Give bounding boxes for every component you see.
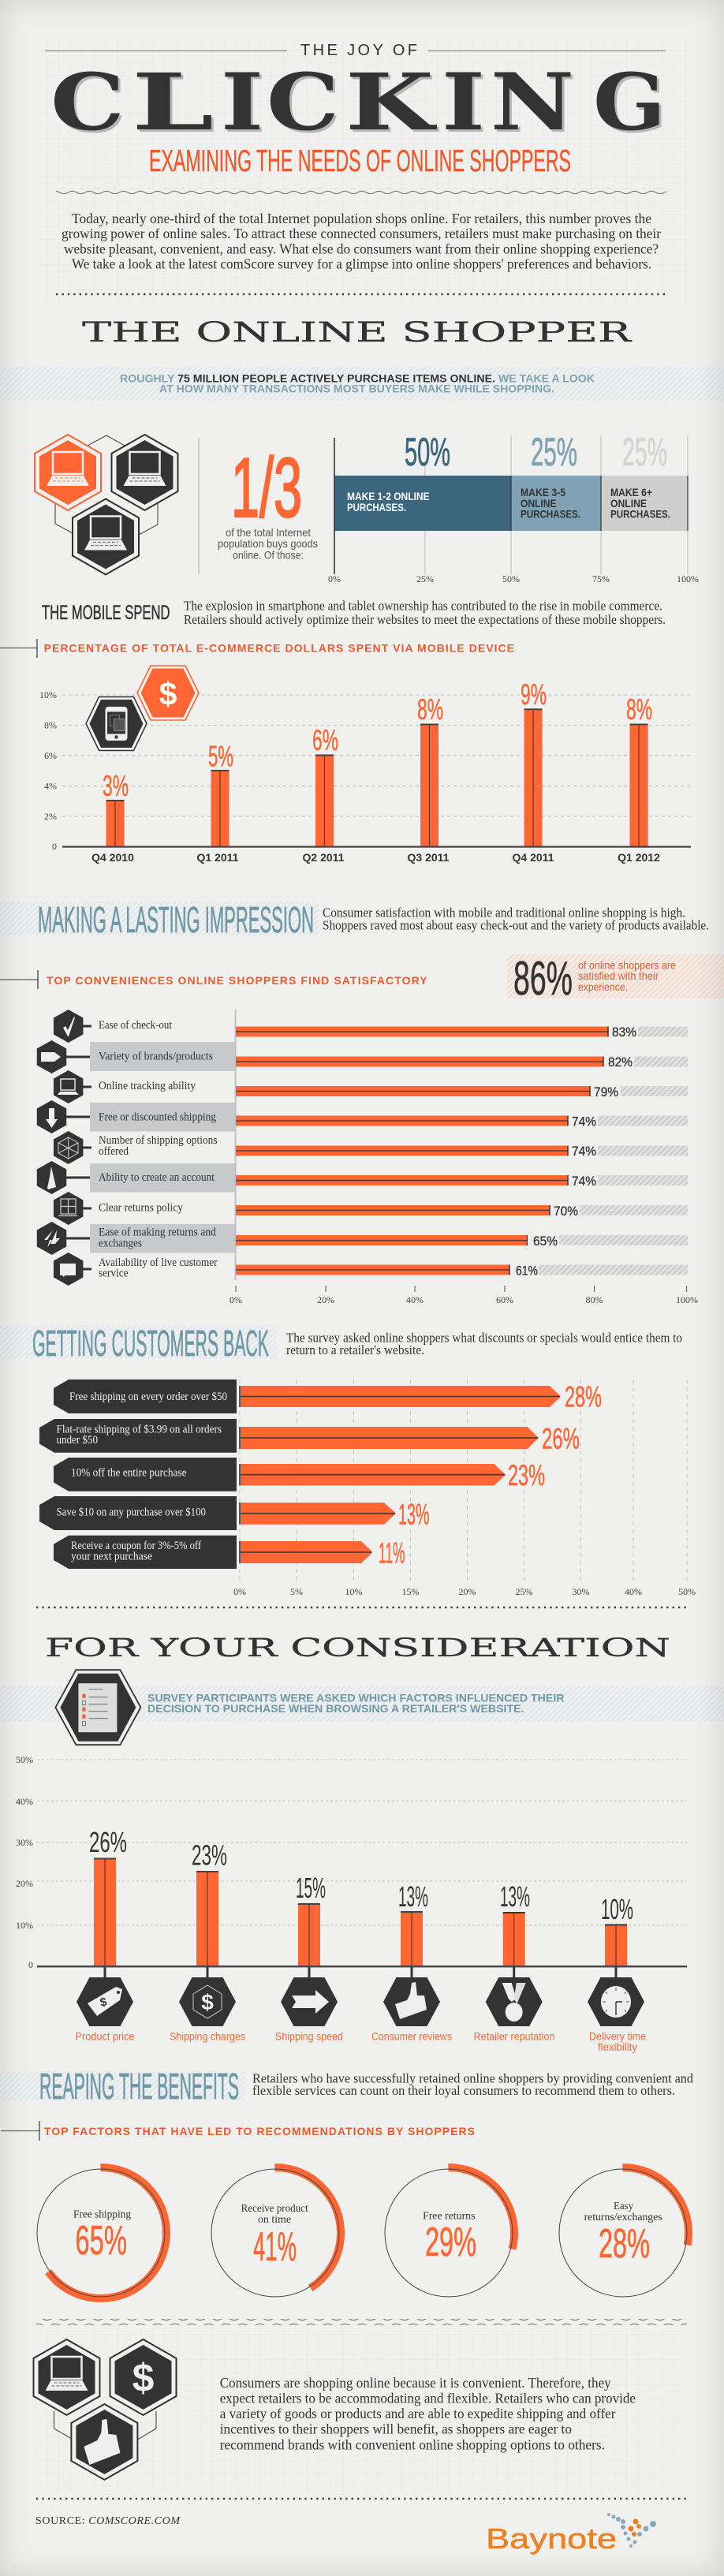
row: free shipping: 74% — [572, 1114, 596, 1129]
icon: laptop hexagon — [33, 2339, 99, 2415]
icon: dollar — [179, 1977, 236, 2026]
stat: one third — [218, 440, 318, 562]
chart: mobile share of e-commerce: Q3 2011 — [408, 851, 450, 864]
row: ease of check-out — [54, 1010, 688, 1043]
intro text: website pleasant, convenient, and easy. What else do consumers want from their online shopping experience? — [64, 241, 659, 257]
heading: for your consideration: FOR YOUR CONSIDERATION — [45, 1633, 670, 1663]
bar: product price — [89, 1826, 127, 1966]
row: shipping options — [54, 1131, 688, 1164]
chart: purchase frequency stacked bar: 25% — [622, 430, 667, 474]
lasting impression text: Consumer satisfaction with mobile and traditional online shopping is high. — [323, 905, 685, 920]
title: G — [593, 57, 666, 148]
title: K — [345, 57, 438, 148]
chart: getting customers back: 40% — [625, 1586, 642, 1597]
survey intro text — [147, 1691, 565, 1715]
bar: Q3 2011: 8% — [417, 693, 443, 726]
donut: free returns: 29% — [425, 2219, 476, 2265]
bar: consumer reviews: 13% — [398, 1880, 428, 1913]
chart: mobile share of e-commerce: Q4 2011 — [513, 851, 554, 864]
row: save ten dollars: 13% — [398, 1499, 429, 1531]
bar: delivery time: 10% — [601, 1893, 633, 1925]
donut: receive on time — [210, 2167, 341, 2298]
band: reaping the benefits — [0, 2071, 244, 2100]
row: ease of check-out: 83% — [612, 1025, 636, 1040]
closing text: a variety of goods or products and are able to expedite shipping and offer — [220, 2406, 615, 2421]
row: create an account: 74% — [572, 1174, 596, 1189]
icon: thumbs up hexagon — [71, 2404, 137, 2480]
row: live customer service: 61% — [516, 1264, 538, 1278]
row: variety of brands — [37, 1040, 688, 1073]
bar: retailer reputation: 13% — [500, 1880, 530, 1913]
survey intro text: DECISION TO PURCHASE WHEN BROWSING A RETAILER'S WEBSITE. — [147, 1702, 524, 1715]
stat: one third: population buys goods — [218, 537, 318, 550]
row: free shipping — [37, 1100, 688, 1133]
chart: mobile share of e-commerce: 0 — [52, 841, 57, 852]
icon: dark laptop hexagon — [112, 435, 178, 510]
donut: easy returns — [558, 2167, 689, 2298]
icon: thumbs up — [383, 1977, 440, 2026]
closing text: recommend brands with convenient online shopping options to others. — [220, 2436, 605, 2452]
chart: mobile share of e-commerce: 2% — [44, 811, 57, 822]
chart: top conveniences: 100% — [676, 1294, 698, 1305]
row: returns and exchanges: exchanges — [99, 1237, 142, 1249]
chart: getting customers back: 11% — [379, 1537, 405, 1570]
chart: purchase frequency stacked bar: 0% — [328, 573, 341, 584]
closing text: expect retailers to be accommodating and flexible. Retailers who can provide — [220, 2390, 636, 2406]
closing text — [220, 2375, 636, 2452]
chart: getting customers back: 15% — [402, 1586, 420, 1597]
callout: 86 percent satisfied: 86% — [513, 952, 573, 1005]
row: variety of brands: Variety of brands/products — [99, 1051, 213, 1063]
mobile spend text: Retailers should actively optimize their websites to meet the expectations of these mobile shoppers. — [184, 612, 666, 627]
chart: getting customers back: 20% — [459, 1586, 476, 1597]
row: clear returns policy: 70% — [554, 1204, 578, 1219]
bar: Q4 2011 — [521, 678, 547, 846]
title: I — [221, 57, 263, 148]
chart: purchase factors: Shipping speed — [275, 2030, 343, 2043]
bar: Q3 2011 — [417, 693, 443, 846]
chart: mobile share of e-commerce: Q1 2011 — [197, 851, 239, 864]
chart: purchase frequency stacked bar: 100% — [677, 573, 699, 584]
row: clear returns policy — [54, 1192, 688, 1225]
icon: dollar hexagon — [137, 666, 199, 720]
lasting impression text — [323, 905, 709, 932]
chart: purchase frequency stacked bar: PURCHASES. — [347, 502, 406, 513]
bar: shipping speed — [296, 1872, 326, 1966]
bar: Q4 2011: 9% — [521, 678, 547, 711]
chart: purchase factors: 10% — [16, 1920, 33, 1931]
chart: purchase factors: 30% — [16, 1837, 33, 1848]
icon cluster: three laptops — [35, 435, 178, 574]
row: coupon: your next purchase — [71, 1551, 152, 1563]
chart: mobile share of e-commerce — [39, 678, 691, 864]
chart: getting customers back: 50% — [678, 1586, 696, 1597]
row: coupon: Receive a coupon for 3%-5% off — [71, 1540, 201, 1552]
chart: mobile share of e-commerce: Q1 2012 — [618, 851, 660, 864]
chart: mobile share of e-commerce: 4% — [44, 781, 57, 792]
bar: shipping speed: 15% — [296, 1872, 326, 1904]
subheading: top conveniences: TOP CONVENIENCES ONLINE SHOPPERS FIND SATISFACTORY — [47, 974, 427, 987]
donut: free shipping — [35, 2167, 166, 2298]
donut: free shipping: 65% — [75, 2218, 127, 2264]
intro text — [62, 211, 661, 271]
heading: the mobile spend: THE MOBILE SPEND — [42, 602, 170, 624]
chart: purchase factors: Product price — [76, 2030, 135, 2043]
row: free shipping over 50: Free shipping on every order over $50 — [69, 1391, 227, 1403]
title: N — [491, 57, 574, 148]
band: survey participants — [0, 1686, 724, 1722]
donut: free shipping: Free shipping — [73, 2209, 131, 2221]
bar: Q1 2012: 8% — [626, 693, 652, 726]
closing text: incentives to their shoppers will benefit, as shoppers are eager to — [220, 2421, 572, 2437]
row: online tracking — [54, 1070, 688, 1103]
chart: purchase frequency stacked bar: 25% — [531, 430, 577, 474]
icon: dollar hexagon: $ — [132, 2356, 155, 2400]
chart: top conveniences: 80% — [585, 1294, 603, 1305]
row: clear returns policy: Clear returns policy — [99, 1202, 183, 1215]
chart: purchase factors: Delivery time — [589, 2030, 646, 2043]
chart: purchase frequency stacked bar: PURCHASES. — [610, 508, 670, 521]
row: create an account — [37, 1161, 688, 1194]
bar: Q2 2011 — [312, 724, 338, 846]
chart: getting customers back: 5% — [290, 1586, 303, 1597]
row: free shipping over 50 — [54, 1379, 602, 1413]
callout: 86 percent satisfied — [507, 952, 724, 1005]
row: live customer service — [54, 1253, 688, 1286]
row: live customer service: service — [99, 1267, 129, 1280]
title: L — [132, 57, 214, 148]
row: ten percent off — [54, 1458, 545, 1491]
title: I — [442, 57, 485, 148]
text: GETTING CUSTOMERS BACK — [32, 1323, 269, 1364]
stat: one third: 1/3 — [231, 440, 302, 535]
bar: retailer reputation — [500, 1880, 530, 1966]
callout: 86 percent satisfied: experience. — [578, 980, 628, 993]
icon: arrow — [281, 1977, 338, 2026]
logo: Baynote: Baynote — [486, 2522, 617, 2555]
bar: consumer reviews — [398, 1880, 428, 1966]
donut: easy returns: 28% — [599, 2221, 650, 2267]
chart: purchase frequency stacked bar: ONLINE — [610, 498, 647, 510]
bar: Q4 2010 — [103, 770, 129, 846]
icon cluster: laptop, dollar, thumbs up — [33, 2339, 177, 2480]
chart: purchase factors: 0 — [28, 1959, 33, 1970]
chart: purchase frequency stacked bar: ONLINE — [521, 498, 557, 510]
heading: the online shopper: THE ONLINE SHOPPER — [82, 317, 633, 349]
row: variety of brands: 82% — [608, 1055, 633, 1070]
stat: one third: of the total Internet — [226, 526, 311, 539]
icon: survey checklist hexagon — [55, 1670, 140, 1745]
chart: purchase frequency stacked bar: 50% — [502, 573, 520, 584]
chart: mobile share of e-commerce: 6% — [44, 750, 57, 761]
chart: purchase factors: Retailer reputation — [473, 2030, 555, 2043]
row: create an account: Ability to create an account — [99, 1171, 215, 1184]
source: SOURCE: COMSCORE.COM — [35, 2515, 181, 2527]
chart: purchase factors: Consumer reviews — [371, 2030, 452, 2043]
mobile spend text — [184, 599, 666, 627]
callout: 86 percent satisfied: of online shoppers are — [578, 959, 676, 972]
row: flat-rate shipping: Flat-rate shipping of $3.99 on all orders — [57, 1424, 222, 1436]
chart: purchase frequency stacked bar: MAKE 6+ — [610, 487, 652, 498]
chart: purchase frequency stacked bar: MAKE 1-2 ONLINE — [347, 491, 429, 502]
title kicker: THE JOY OF — [300, 42, 417, 59]
chart: top conveniences: 60% — [496, 1294, 513, 1305]
chart: purchase factors: 40% — [16, 1796, 33, 1807]
row: returns and exchanges — [37, 1222, 688, 1255]
row: save ten dollars — [39, 1496, 429, 1531]
chart: purchase factors: 20% — [16, 1878, 33, 1889]
row: shipping options: offered — [99, 1145, 129, 1158]
reaping text: Retailers who have successfully retained online shoppers by providing convenient and — [252, 2071, 693, 2086]
chart: getting customers back: 10% — [345, 1586, 363, 1597]
chart: getting customers back: 25% — [516, 1586, 533, 1597]
icon: dollar hexagon — [110, 2339, 177, 2415]
chart: purchase frequency stacked bar: PURCHASES. — [521, 508, 580, 521]
title: C — [267, 57, 339, 148]
chart: top conveniences — [37, 1010, 698, 1305]
row: live customer service: Availability of live customer — [99, 1256, 218, 1269]
chart: top conveniences: 20% — [317, 1294, 334, 1305]
stat: one third: online. Of those: — [233, 549, 304, 562]
chart: purchase frequency stacked bar: 75% — [592, 573, 610, 584]
icon: medal — [486, 1977, 543, 2026]
chart: mobile share of e-commerce: 10% — [39, 689, 57, 700]
row: save ten dollars: Save $10 on any purchase over $100 — [57, 1506, 206, 1519]
icon: dollar: $ — [201, 1990, 214, 2014]
chart: purchase frequency stacked bar — [328, 430, 699, 584]
logo: Baynote — [486, 2513, 656, 2555]
customers back text — [286, 1331, 682, 1357]
row: coupon — [54, 1536, 405, 1570]
title: C — [50, 57, 125, 148]
header grid paper — [37, 38, 688, 301]
chart: mobile share of e-commerce: Q2 2011 — [303, 851, 345, 864]
row: ease of check-out: Ease of check-out — [99, 1019, 173, 1032]
icon: dollar hexagon: $ — [159, 675, 177, 711]
chart: purchase frequency stacked bar: 25% — [416, 573, 434, 584]
intro text: growing power of online sales. To attract these connected consumers, retailers must make purchasing on their — [62, 226, 661, 241]
row: ten percent off: 23% — [508, 1459, 545, 1491]
band: online shopper intro: ROUGHLY 75 MILLION PEOPLE ACTIVELY PURCHASE ITEMS ONLINE. WE TAKE A LOOK — [120, 372, 595, 385]
chart: purchase factors: 50% — [16, 1754, 33, 1765]
icon: orange laptop hexagon — [35, 435, 101, 510]
band: online shopper intro: AT HOW MANY TRANSACTIONS MOST BUYERS MAKE WHILE SHOPPING. — [159, 382, 554, 394]
row: free shipping over 50: 28% — [565, 1380, 602, 1413]
row: free shipping: Free or discounted shipping — [99, 1111, 216, 1124]
bar: shipping charges — [192, 1839, 227, 1966]
band: online shopper intro — [0, 367, 724, 401]
chart: purchase factors: Shipping charges — [170, 2030, 245, 2043]
chart: purchase frequency stacked bar: MAKE 3-5 — [521, 487, 565, 498]
row: online tracking: Online tracking ability — [99, 1080, 196, 1092]
row: returns and exchanges: 65% — [533, 1234, 558, 1249]
icon: price tag — [77, 1977, 133, 2026]
row: flat-rate shipping: 26% — [542, 1423, 580, 1455]
chart: purchase frequency stacked bar: 50% — [405, 430, 450, 474]
text: REAPING THE BENEFITS — [39, 2066, 239, 2107]
bar: Q1 2011 — [208, 740, 233, 846]
bar: Q4 2010: 3% — [103, 770, 129, 802]
customers back text: The survey asked online shoppers what discounts or specials would entice them to — [286, 1331, 682, 1346]
chart: top conveniences: 40% — [406, 1294, 424, 1305]
bar: product price: 26% — [89, 1826, 127, 1858]
row: shipping options: 74% — [572, 1144, 596, 1159]
icon: lower laptop hexagon — [73, 498, 139, 574]
bar: shipping charges: 23% — [192, 1839, 227, 1871]
icon: clock — [588, 1977, 644, 2026]
bar: delivery time — [601, 1893, 633, 1966]
chart: mobile share of e-commerce: 8% — [44, 719, 57, 730]
survey intro text: SURVEY PARTICIPANTS WERE ASKED WHICH FACTORS INFLUENCED THEIR — [147, 1691, 565, 1704]
chart: getting customers back — [39, 1379, 696, 1597]
bar: Q1 2012 — [626, 693, 652, 846]
bar: Q1 2011: 5% — [208, 740, 233, 773]
donut: easy returns: returns/exchanges — [584, 2212, 662, 2223]
reaping text: flexible services can count on their loyal consumers to recommend them to others. — [252, 2083, 675, 2098]
chart: top conveniences: 0% — [230, 1294, 242, 1305]
callout: 86 percent satisfied: satisfied with their — [578, 969, 659, 982]
subheading: top factors: TOP FACTORS THAT HAVE LED TO RECOMMENDATIONS BY SHOPPERS — [44, 2125, 475, 2137]
closing text: Consumers are shopping online because it is convenient. Therefore, they — [220, 2375, 611, 2391]
donut: free returns: Free returns — [423, 2211, 475, 2223]
intro text: We take a look at the latest comScore survey for a glimpse into online shoppers' preferences and behaviors. — [72, 256, 651, 271]
subheading: mobile device chart: PERCENTAGE OF TOTAL E-COMMERCE DOLLARS SPENT VIA MOBILE DEVICE — [44, 642, 514, 655]
chart: purchase factors: flexibility — [598, 2040, 637, 2053]
row: ten percent off: 10% off the entire purchase — [71, 1467, 187, 1480]
row: returns and exchanges: Ease of making returns and — [99, 1226, 216, 1239]
donut: free returns — [383, 2167, 514, 2298]
row: flat-rate shipping — [39, 1419, 580, 1455]
donut: receive on time: 41% — [253, 2224, 297, 2270]
chart: mobile share of e-commerce: Q4 2010 — [91, 851, 134, 864]
donut: easy returns: Easy — [614, 2201, 633, 2212]
row: flat-rate shipping: under $50 — [57, 1434, 98, 1447]
band: lasting impression — [0, 902, 319, 935]
chart: getting customers back: 0% — [233, 1586, 246, 1597]
row: shipping options: Number of shipping options — [99, 1134, 218, 1147]
donut: receive on time: Receive product — [241, 2203, 308, 2215]
intro text: Today, nearly one-third of the total Internet population shops online. For retailers, this number proves the — [72, 211, 651, 226]
text: MAKING A LASTING IMPRESSION — [38, 899, 314, 940]
mobile spend text: The explosion in smartphone and tablet ownership has contributed to the rise in mobile commerce. — [184, 599, 662, 614]
row: online tracking: 79% — [594, 1085, 618, 1099]
customers back text: return to a retailer's website. — [286, 1342, 424, 1357]
chart: purchase factors — [16, 1754, 687, 2053]
chart: getting customers back: 30% — [573, 1586, 590, 1597]
icon: phone hexagon — [86, 697, 147, 751]
donut: receive on time: on time — [258, 2214, 291, 2226]
band: getting customers back — [0, 1325, 277, 1359]
icon: price tag: $ — [99, 1995, 109, 2010]
bar: Q2 2011: 6% — [312, 724, 338, 756]
reaping text — [252, 2071, 693, 2098]
